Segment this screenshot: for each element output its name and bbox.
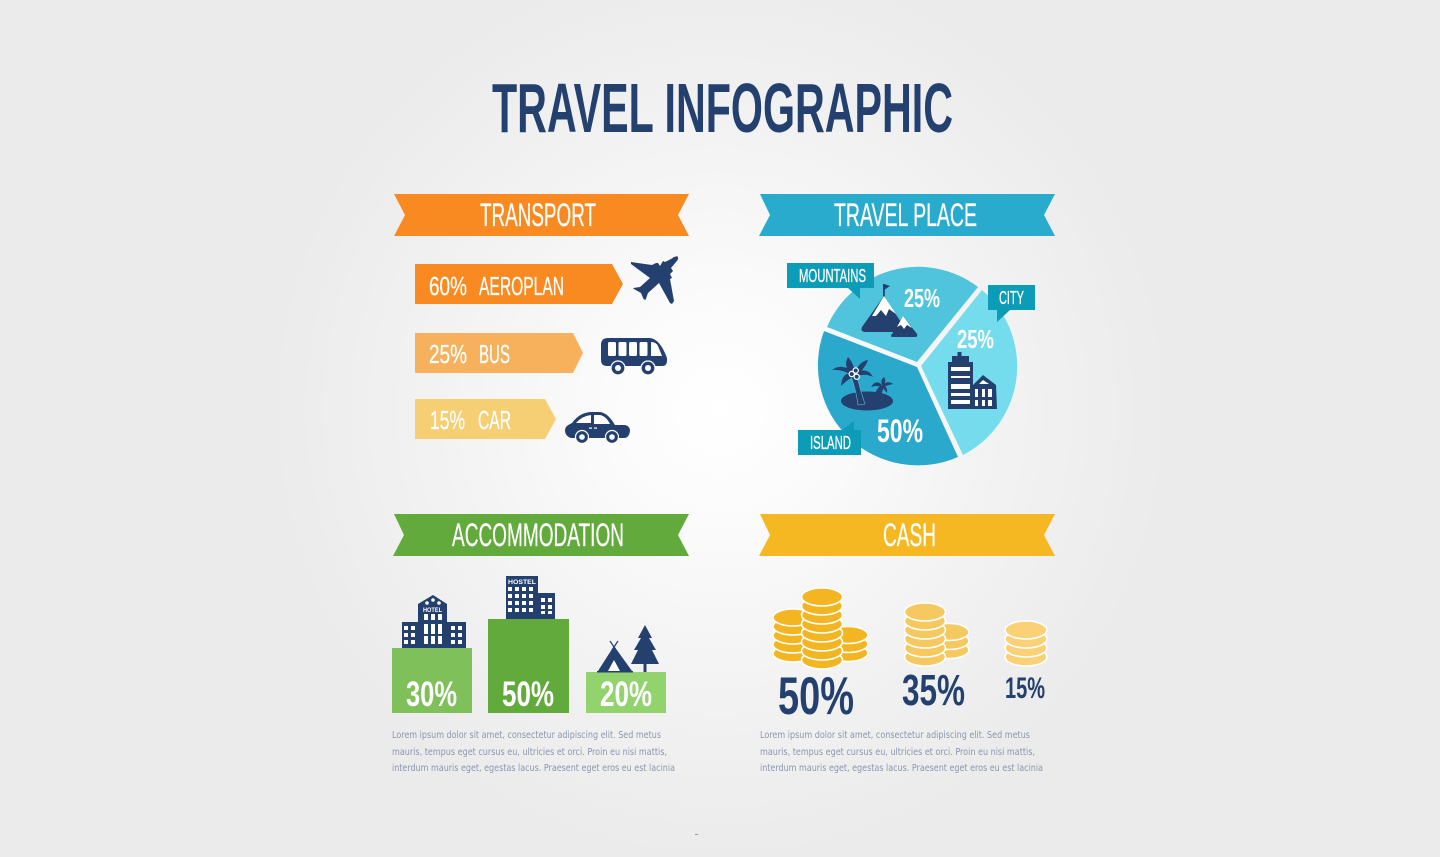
panel: travel place — [759, 194, 1055, 465]
panel: accommodation — [392, 514, 689, 714]
icon: city buildings — [948, 352, 997, 409]
heading ribbon: transport: TRANSPORT — [480, 197, 596, 233]
callout: city — [988, 285, 1035, 322]
bar: bus 25%: BUS — [479, 339, 510, 369]
value: cash 35%: 35% — [902, 666, 965, 715]
pie chart: 25% — [957, 324, 994, 354]
heading ribbon: cash — [759, 514, 1055, 556]
icon: small coin stack — [1005, 621, 1047, 666]
bar: hostel 50%: 50% — [502, 675, 554, 714]
icon: hotel: HOTEL — [423, 608, 442, 614]
icon: aeroplane — [631, 256, 678, 304]
value: cash 50%: 50% — [778, 667, 854, 726]
title: TRAVEL INFOGRAPHIC — [492, 69, 953, 147]
heading ribbon: cash: CASH — [883, 517, 936, 553]
icon: hostel: HOSTEL — [508, 579, 536, 586]
bar: hotel 30%: 30% — [406, 675, 457, 714]
pie chart: 50% — [877, 413, 923, 449]
heading ribbon: accommodation: ACCOMMODATION — [452, 517, 624, 553]
icon: palm island — [832, 357, 893, 410]
text block: accommodation description — [392, 730, 675, 774]
heading ribbon: travel place: TRAVEL PLACE — [834, 197, 977, 233]
bar: aeroplane 60%: AEROPLAN — [479, 271, 564, 301]
bar: car 15% — [415, 399, 556, 439]
callout: island: ISLAND — [810, 433, 851, 453]
bar: aeroplane 60% — [415, 264, 623, 304]
heading ribbon: travel place — [759, 194, 1055, 236]
panel: transport — [394, 194, 689, 444]
bar: hostel 50% — [488, 619, 569, 714]
callout: island — [798, 421, 861, 455]
pie chart: 25% — [904, 283, 940, 313]
text block: cash description: mauris, tempus eget cursus eu, ultricies et orci. Proin eu nisi mattis, — [760, 747, 1035, 758]
icon: large coin stack — [773, 588, 868, 669]
bar: camping 20%: 20% — [600, 675, 652, 714]
text block: accommodation description: Lorem ipsum dolor sit amet, consectetur adipiscing elit. Sed metus — [392, 730, 661, 741]
slice: city 25% — [921, 290, 1017, 455]
text block: accommodation description: mauris, tempus eget cursus eu, ultricies et orci. Proin eu nisi mattis, — [392, 747, 667, 758]
bar: car 15%: 15% — [430, 405, 465, 435]
callout: city: CITY — [999, 288, 1024, 308]
callout: mountains — [787, 263, 874, 299]
icon: mountains — [862, 284, 917, 337]
icon: tent and tree — [597, 625, 659, 672]
heading ribbon: transport — [394, 194, 689, 236]
bar: aeroplane 60%: 60% — [429, 271, 467, 301]
slice: mountains 25% — [827, 267, 978, 362]
callout: mountains: MOUNTAINS — [799, 266, 866, 286]
text block: cash description: Lorem ipsum dolor sit amet, consectetur adipiscing elit. Sed metus — [760, 730, 1030, 741]
icon: hotel — [402, 595, 466, 648]
text block: cash description: interdum mauris eget, egestas lacus. Praesent eget eros eu est lacinia — [760, 763, 1043, 774]
bar: bus 25% — [415, 333, 583, 373]
icon: hostel — [506, 576, 555, 619]
icon: bus — [601, 338, 667, 375]
text block: accommodation description: interdum mauris eget, egestas lacus. Praesent eget eros eu est lacinia — [392, 763, 675, 774]
panel: cash — [759, 514, 1055, 726]
value: cash 15%: 15% — [1005, 672, 1045, 705]
pie chart — [818, 267, 1017, 465]
bar: bus 25%: 25% — [429, 339, 467, 369]
icon: car — [565, 412, 630, 444]
bar: car 15%: CAR — [478, 405, 511, 435]
bar: hotel 30% — [392, 648, 472, 714]
icon: medium coin stack — [904, 603, 969, 666]
heading ribbon: accommodation — [393, 514, 689, 556]
slice: island 50% — [818, 331, 958, 465]
text block: cash description — [760, 730, 1043, 774]
